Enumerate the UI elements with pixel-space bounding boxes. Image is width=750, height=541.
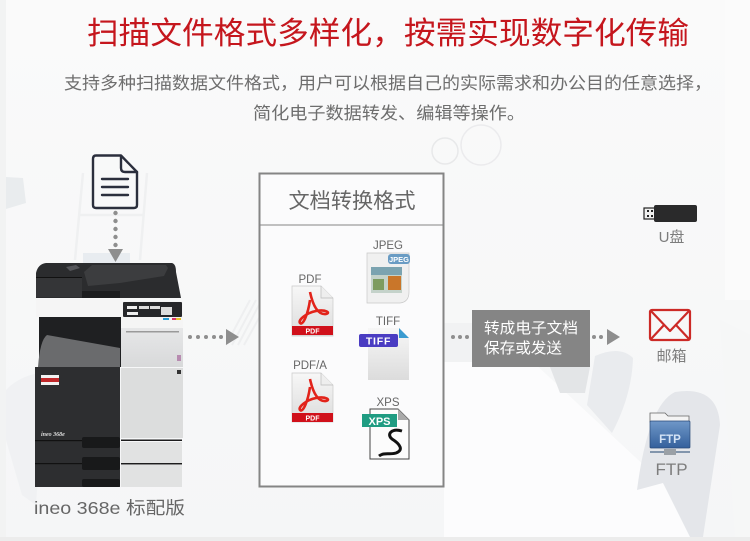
printer right panels — [121, 328, 183, 487]
format: PDF: PDF — [306, 328, 320, 336]
printer: ineo 368e — [35, 263, 183, 487]
format: PDF/A — [292, 360, 333, 422]
icon: document — [93, 156, 137, 208]
format: XPS — [362, 397, 409, 459]
printer scanner unit — [36, 263, 181, 298]
format: XPS: XPS — [376, 397, 400, 409]
printer control panel — [121, 301, 183, 328]
panel heading: 文档转换格式 — [288, 190, 416, 213]
callout: convert and save or send: 转成电子文档 — [484, 320, 578, 337]
title: 扫描文件格式多样化，按需实现数字化传输 — [87, 16, 689, 51]
format: PDF: PDF — [298, 274, 322, 286]
arrow: document to printer — [108, 211, 123, 262]
arrow: formats to outputs, right head — [592, 329, 620, 345]
callout: convert and save or send: 保存或发送 — [484, 340, 562, 357]
arrow: printer to formats — [188, 329, 239, 345]
label: USB: U盘 — [659, 228, 684, 246]
description text: 支持多种扫描数据文件格式，用户可以根据自己的实际需求和办公目的任意选择， — [64, 73, 712, 93]
printer white band — [36, 299, 122, 317]
format: PDF — [292, 274, 333, 336]
label: mailbox: 邮箱 — [656, 348, 687, 365]
panel: document conversion formats — [259, 174, 444, 486]
icon: FTP folder — [650, 413, 690, 455]
printer output bay — [38, 317, 121, 367]
format: TIFF: TIFF — [366, 336, 391, 348]
label: FTP: FTP — [655, 460, 688, 479]
callout: convert and save or send — [472, 310, 590, 367]
description text: 简化电子数据转发、编辑等操作。 — [253, 103, 525, 123]
format: JPEG — [367, 240, 410, 303]
format: JPEG: JPEG — [389, 255, 409, 264]
format: XPS: XPS — [368, 416, 391, 428]
description text — [64, 73, 712, 123]
arrow: formats to outputs, left dots — [451, 335, 469, 339]
format: PDF/A: PDF — [306, 416, 320, 422]
format: PDF/A: PDF/A — [293, 360, 327, 372]
icon: mail — [650, 310, 690, 340]
printer label: ineo 368e 标配版 — [34, 498, 185, 518]
format: TIFF — [359, 316, 409, 380]
icon: FTP folder: FTP — [659, 434, 681, 446]
printer cabinet: ineo 368e — [41, 432, 65, 438]
format: TIFF: TIFF — [376, 316, 400, 328]
icon: USB drive — [644, 205, 697, 222]
format: JPEG: JPEG — [373, 240, 403, 252]
printer cabinet — [35, 367, 120, 487]
